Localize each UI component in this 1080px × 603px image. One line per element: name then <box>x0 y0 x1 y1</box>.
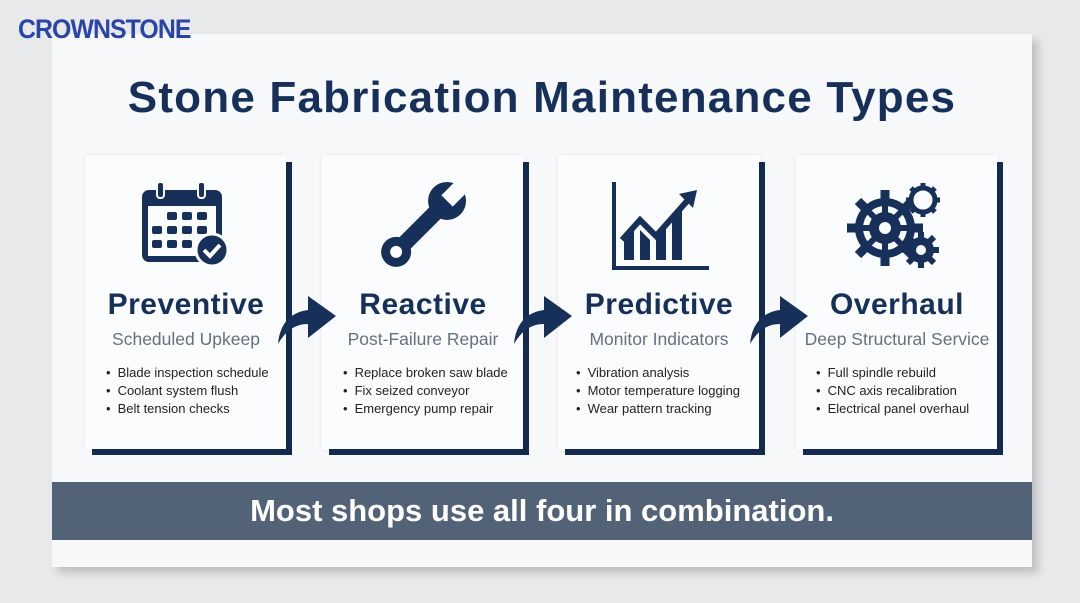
arrow 3 <box>750 296 808 344</box>
banner <box>52 482 1032 540</box>
title: Stone Fabrication Maintenance Types <box>128 73 956 122</box>
bullets: CNC axis recalibration <box>828 383 957 398</box>
bullets: Coolant system flush <box>118 383 238 398</box>
subtitle: Post-Failure Repair <box>348 329 498 349</box>
bullets: Fix seized conveyor <box>355 383 469 398</box>
card: overhaul <box>803 162 1003 455</box>
icon: gears <box>847 183 940 268</box>
bullets <box>344 365 508 416</box>
bullets: Emergency pump repair <box>355 401 493 416</box>
bullets: Replace broken saw blade <box>355 365 508 380</box>
subtitle: Deep Structural Service <box>805 329 989 349</box>
icon: wrench <box>381 182 466 267</box>
logo: CROWNSTONE <box>18 14 191 44</box>
icon: chart <box>612 182 709 270</box>
heading: Predictive <box>585 288 733 321</box>
bullets <box>106 365 269 416</box>
bullets: Motor temperature logging <box>588 383 740 398</box>
arrow 1 <box>278 296 336 344</box>
card: predictive <box>565 162 765 455</box>
bullets: Full spindle rebuild <box>828 365 936 380</box>
subtitle: Scheduled Upkeep <box>112 329 260 349</box>
subtitle: Monitor Indicators <box>589 329 729 349</box>
arrow 2 <box>514 296 572 344</box>
bullets <box>816 365 969 416</box>
bullets: Vibration analysis <box>588 365 689 380</box>
bullets: Blade inspection schedule <box>118 365 269 380</box>
bullets: Wear pattern tracking <box>588 401 712 416</box>
bullets: Belt tension checks <box>118 401 230 416</box>
card: preventive <box>92 162 292 455</box>
banner: Most shops use all four in combination. <box>250 493 834 528</box>
heading: Preventive <box>108 288 264 321</box>
heading: Reactive <box>359 288 487 321</box>
bullets: Electrical panel overhaul <box>828 401 969 416</box>
icon: calendar <box>142 183 226 264</box>
heading: Overhaul <box>830 288 964 321</box>
bullets <box>576 365 740 416</box>
card: reactive <box>329 162 529 455</box>
